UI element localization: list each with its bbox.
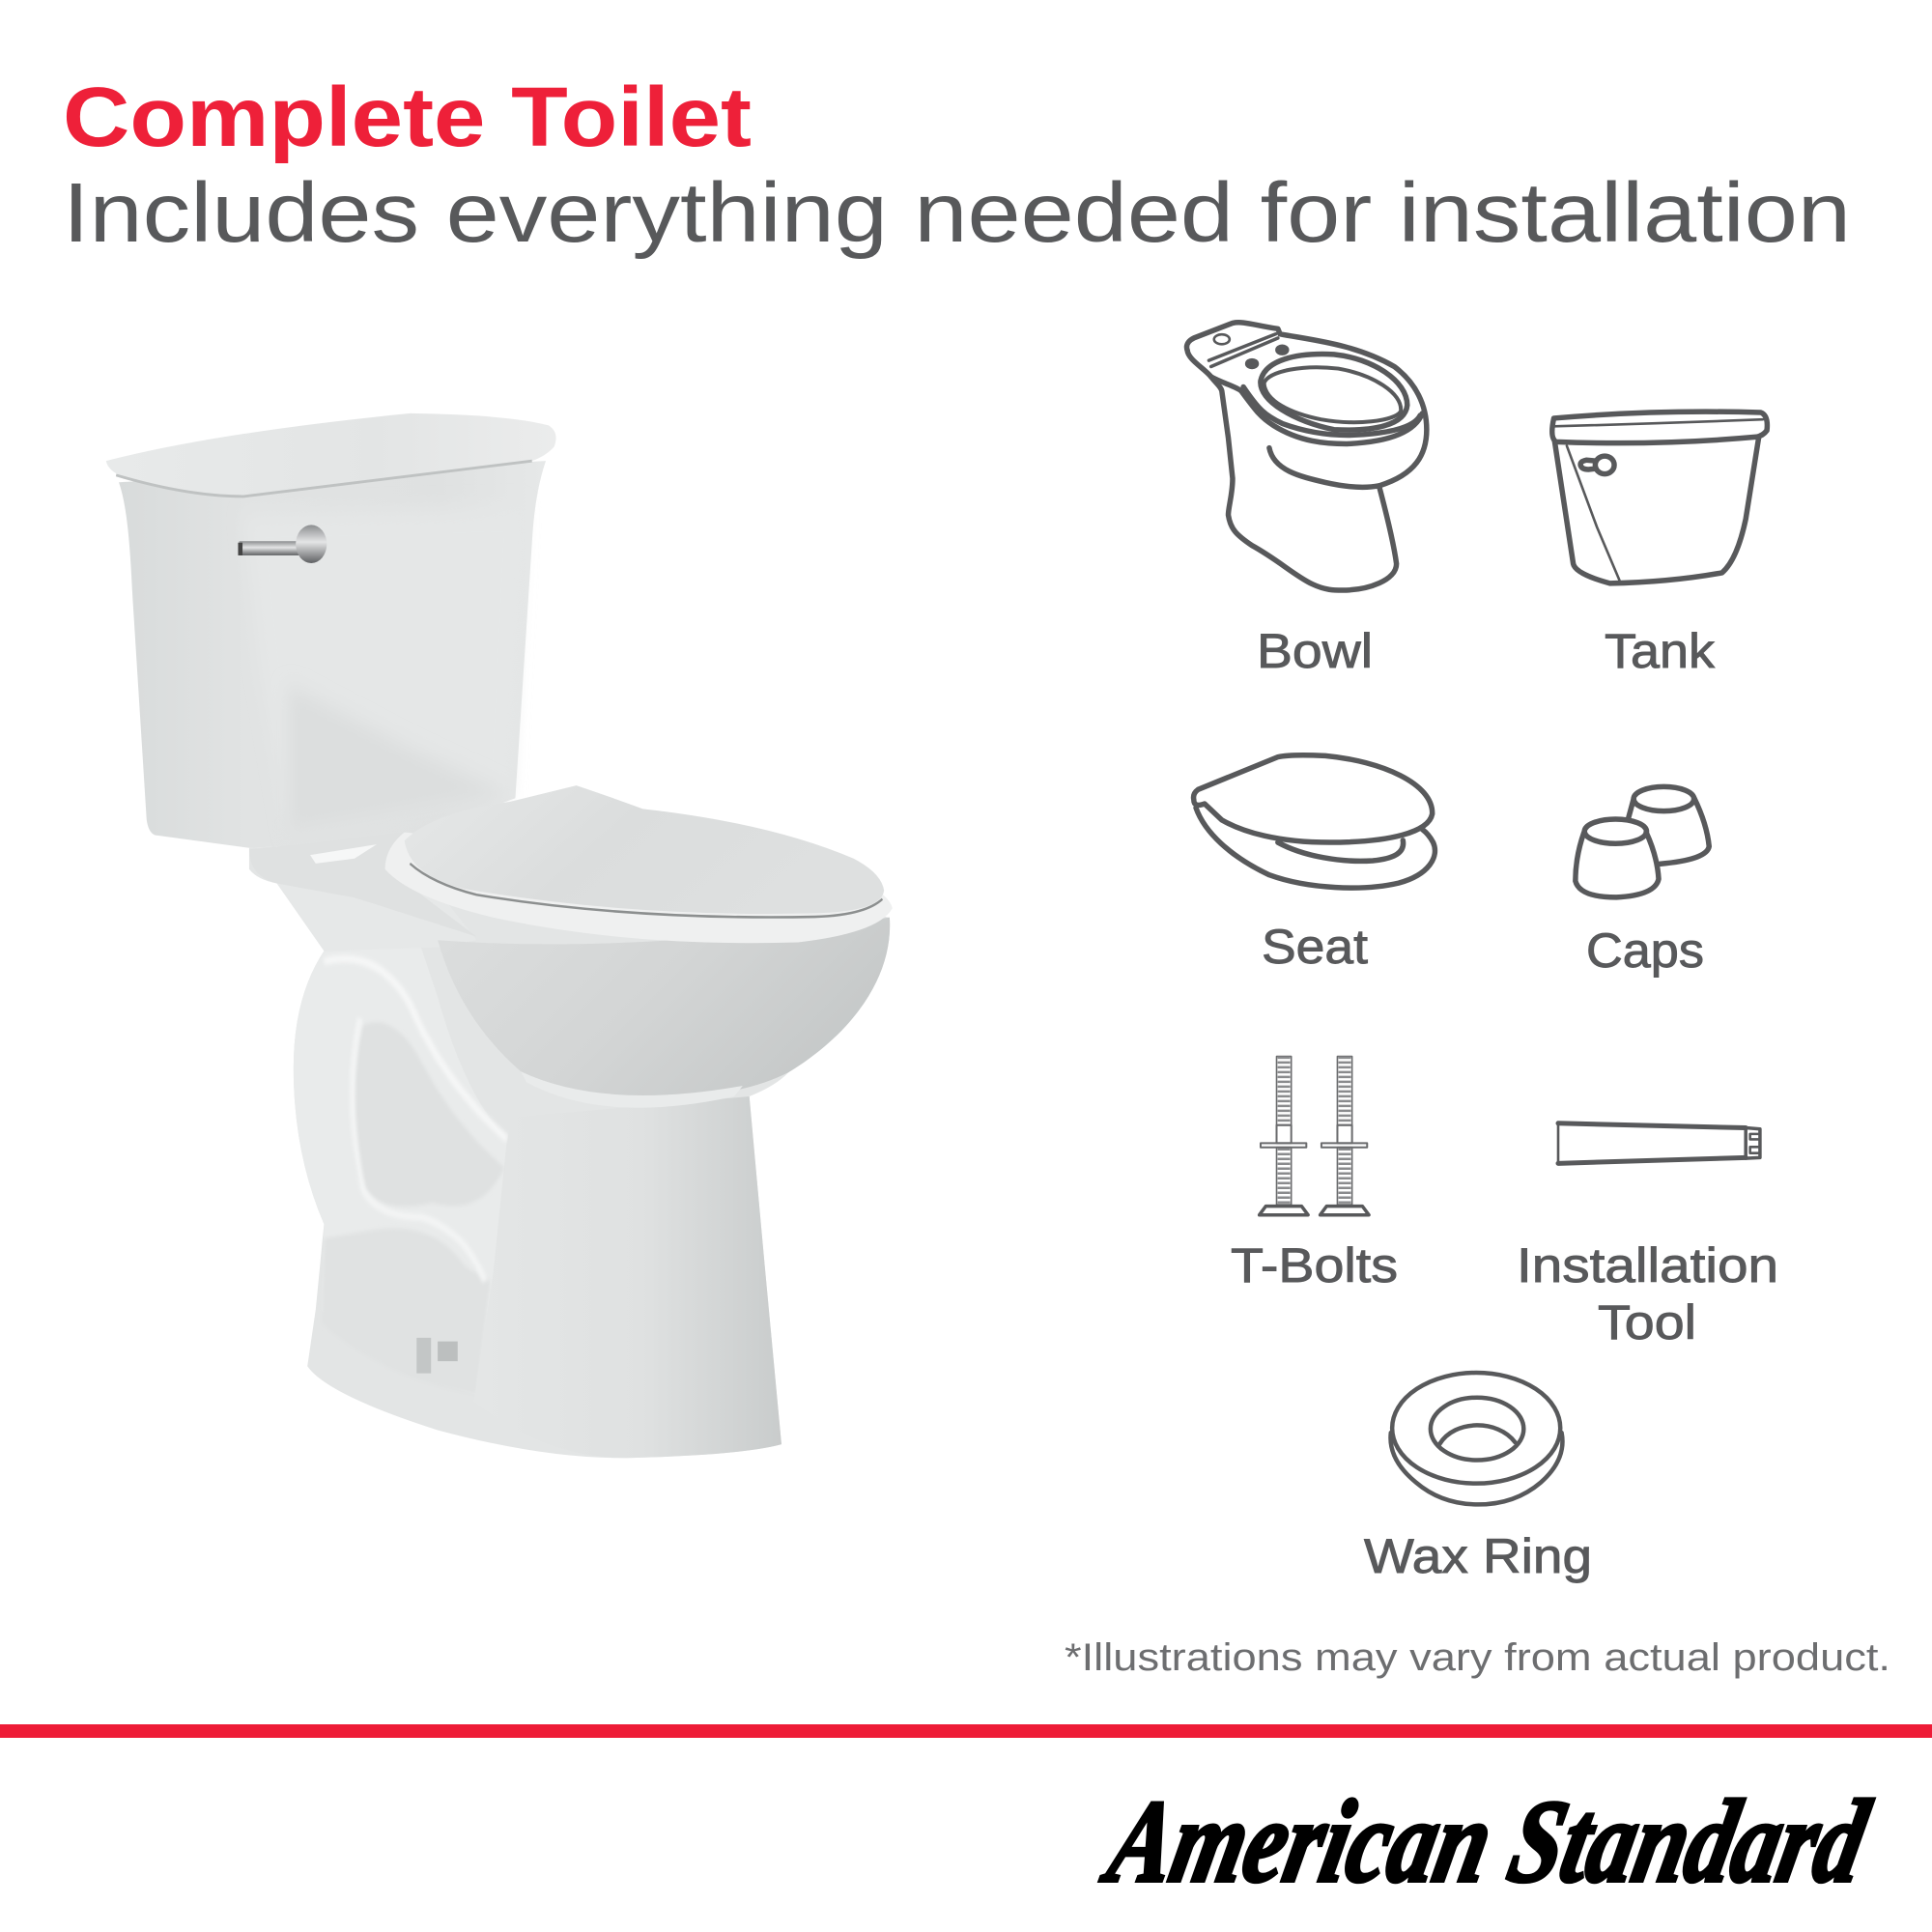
subtitle: Includes everything needed for installation <box>63 166 1851 260</box>
label: installation tool: Installation <box>1517 1238 1778 1293</box>
icon: bowl <box>1187 323 1427 590</box>
footnote: *Illustrations may vary from actual product. <box>1065 1636 1890 1679</box>
label: installation tool <box>1517 1238 1778 1350</box>
label: t-bolts: T-Bolts <box>1231 1238 1398 1293</box>
icon: tank <box>1552 412 1767 583</box>
icon: seat <box>1194 755 1435 888</box>
icon: caps <box>1576 786 1709 897</box>
title: Complete Toilet <box>63 71 752 164</box>
icon: wax ring <box>1391 1373 1562 1504</box>
label: seat: Seat <box>1262 920 1368 974</box>
product photo: complete toilet <box>106 413 893 1458</box>
label: wax ring: Wax Ring <box>1364 1529 1592 1583</box>
label: tank: Tank <box>1605 624 1716 678</box>
label: installation tool: Tool <box>1598 1295 1696 1350</box>
red divider bar <box>0 1724 1932 1738</box>
label: caps: Caps <box>1586 923 1704 978</box>
icon: t-bolts <box>1260 1057 1369 1215</box>
label: bowl: Bowl <box>1257 624 1373 678</box>
icon: installation tool <box>1558 1122 1760 1164</box>
